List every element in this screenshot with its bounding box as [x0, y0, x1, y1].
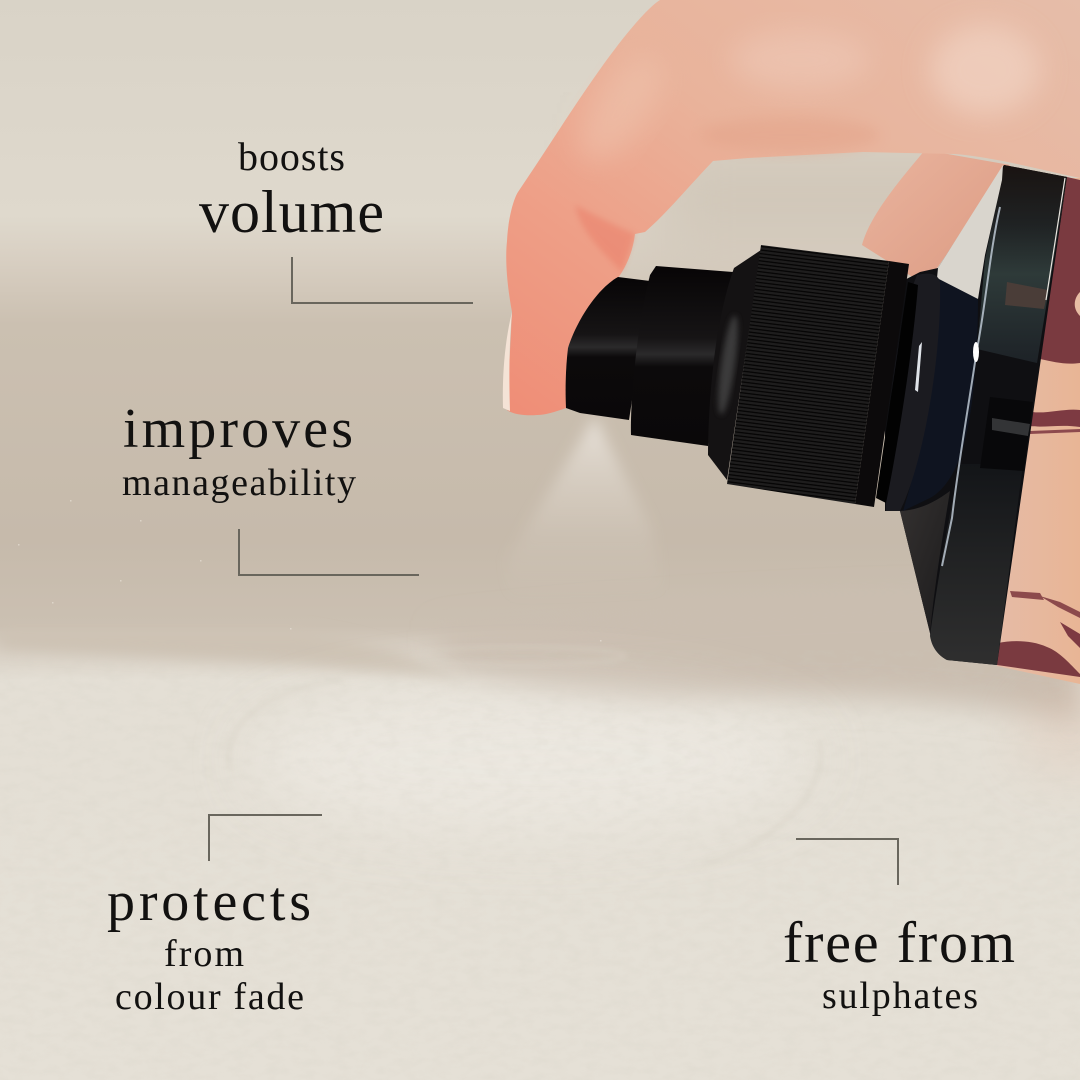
- connector line: [796, 839, 898, 885]
- black gasket: [876, 282, 918, 503]
- pump middle section: [631, 266, 733, 446]
- connector line: [239, 529, 419, 575]
- finger highlights: [563, 25, 1040, 272]
- text: protects: protects: [107, 871, 311, 933]
- text: from: from: [164, 933, 244, 975]
- icon: second finger behind bottle: [862, 150, 1010, 285]
- callout: protects from colour fade: [107, 815, 322, 1018]
- label: patterned wrap: [997, 177, 1080, 684]
- connector line: [292, 257, 473, 303]
- specular streak: [942, 207, 1000, 566]
- lower cone reflection: [900, 491, 950, 633]
- callout: boosts volume: [199, 134, 473, 303]
- lower band of shoulder: [930, 464, 1023, 665]
- white reflection wedge: [937, 165, 1003, 299]
- ribbed collar: [727, 245, 909, 507]
- text: volume: volume: [199, 179, 384, 245]
- hand with pressing finger: [503, 0, 1080, 415]
- bottle body with label: [876, 165, 1080, 684]
- callout: improves manageability: [122, 398, 419, 575]
- text: manageability: manageability: [122, 462, 356, 504]
- bottle neck base (black backing): [885, 165, 1067, 665]
- collar flange: [708, 250, 761, 480]
- fingernail: [503, 312, 512, 411]
- neck ring: [886, 274, 940, 511]
- text: free from: free from: [783, 910, 1015, 975]
- spray nozzle button: [566, 277, 650, 420]
- label edge highlight: [1046, 178, 1065, 300]
- reflection blocks: [980, 282, 1048, 471]
- connector line: [209, 815, 322, 861]
- text: colour fade: colour fade: [115, 976, 304, 1018]
- text: sulphates: sulphates: [822, 975, 978, 1017]
- upper band of shoulder: [977, 165, 1067, 363]
- callout: free from sulphates: [783, 839, 1015, 1017]
- dark blue knurled ring: [903, 278, 978, 511]
- text: improves: improves: [123, 398, 353, 460]
- spray mist: [508, 417, 660, 600]
- text: boosts: boosts: [238, 134, 345, 179]
